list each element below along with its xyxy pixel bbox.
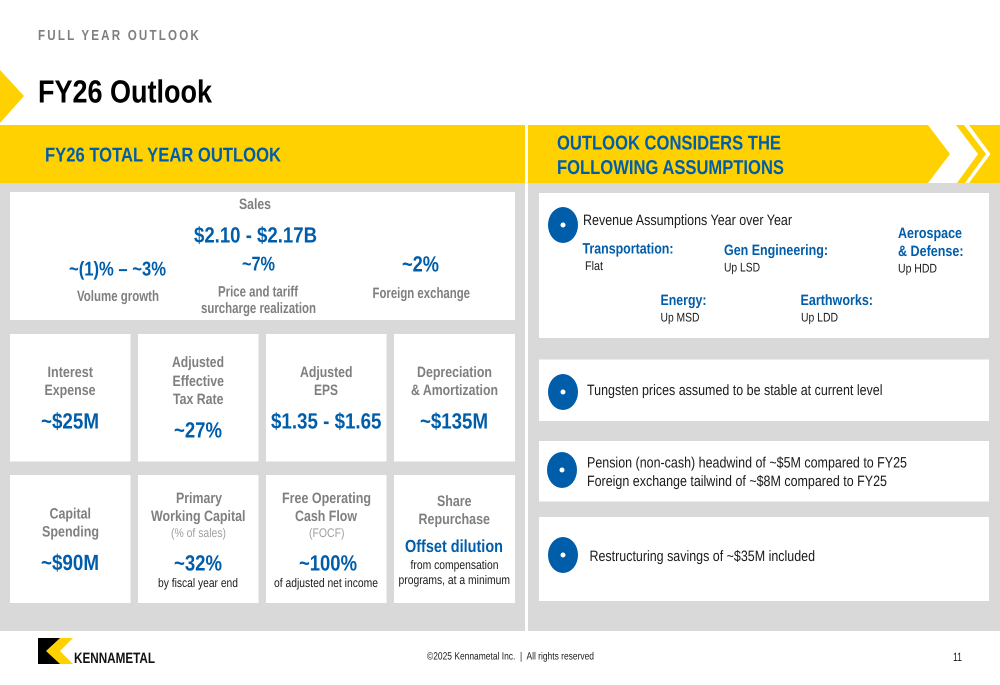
- panel: primary working capital: ~32%: [174, 550, 222, 576]
- aerospace and defense: Aerospace: [898, 225, 962, 242]
- wordmark: KENNAMETAL: [74, 650, 155, 667]
- aerospace and defense: [898, 225, 964, 276]
- panel: pension and foreign exchange: [539, 441, 989, 502]
- gen engineering: Gen Engineering:: [724, 242, 828, 259]
- panel: revenue assumptions: [539, 193, 989, 338]
- panel: share repurchase: from compensation: [410, 558, 499, 572]
- price label: Price and tariff: [218, 284, 299, 300]
- panel: interest expense: Interest: [48, 364, 93, 381]
- panel: depreciation and amortization: & Amortization: [411, 382, 498, 399]
- right header text: OUTLOOK CONSIDERS THE: [557, 132, 781, 154]
- left yellow header band: [0, 125, 525, 183]
- price value: ~7%: [242, 254, 275, 276]
- panel: tungsten: [539, 360, 989, 421]
- aerospace and defense: Up HDD: [898, 262, 937, 276]
- energy: [660, 292, 706, 324]
- icon: yellow title arrow: [0, 70, 24, 123]
- panel: depreciation and amortization: ~$135M: [420, 408, 488, 434]
- aerospace and defense: & Defense:: [898, 243, 964, 260]
- panel: share repurchase: [394, 475, 515, 603]
- price label: surcharge realization: [201, 300, 316, 317]
- sales heading: Sales: [239, 196, 271, 213]
- energy: Up MSD: [660, 310, 700, 324]
- panel: share repurchase: Offset dilution: [405, 536, 503, 556]
- panel: adjusted effective tax rate: Tax Rate: [173, 391, 224, 408]
- panel: primary working capital: [138, 475, 258, 603]
- panel: free operating cash flow: Cash Flow: [295, 508, 357, 525]
- icon: chevron one: [956, 125, 986, 183]
- icon: bullet: [547, 452, 577, 488]
- panel: free operating cash flow: Free Operating: [282, 490, 371, 507]
- price label: [201, 284, 316, 317]
- title: FY26 Outlook: [38, 74, 212, 110]
- transportation: Flat: [585, 259, 603, 273]
- panel: share repurchase: Share: [437, 493, 472, 510]
- panel: primary working capital: Working Capital: [151, 508, 246, 525]
- foreign exchange value: ~2%: [402, 252, 439, 276]
- panel: adjusted EPS: [266, 334, 386, 462]
- panel: free operating cash flow: ~100%: [299, 550, 357, 576]
- panel: depreciation and amortization: [394, 334, 515, 462]
- icon: bullet: [548, 374, 578, 410]
- earthworks: Up LDD: [801, 310, 838, 324]
- icon: bullet: [548, 207, 578, 243]
- panel: interest expense: ~$25M: [41, 408, 99, 434]
- panel: adjusted effective tax rate: ~27%: [174, 418, 222, 442]
- revenue heading: Revenue Assumptions Year over Year: [583, 212, 792, 229]
- right header text: FOLLOWING ASSUMPTIONS: [557, 157, 784, 179]
- right yellow header band with chevrons: [528, 125, 1000, 183]
- sales value: $2.10 - $2.17B: [194, 222, 317, 248]
- panel: free operating cash flow: of adjusted net income: [274, 576, 378, 590]
- gen engineering: [724, 242, 828, 274]
- volume growth value: ~(1)% – ~3%: [69, 258, 166, 280]
- panel: adjusted effective tax rate: Effective: [172, 373, 224, 390]
- panel: share repurchase: programs, at a minimum: [398, 573, 510, 587]
- foreign exchange label: Foreign exchange: [372, 285, 470, 302]
- panel: interest expense: Expense: [44, 382, 96, 399]
- tungsten text: Tungsten prices assumed to be stable at current level: [587, 382, 882, 399]
- icon: chevron two: [969, 125, 1000, 183]
- right header text: [557, 132, 784, 179]
- icon: K mark: [38, 638, 73, 664]
- panel: adjusted EPS: Adjusted: [300, 364, 352, 381]
- panel: primary working capital: (% of sales): [171, 526, 226, 540]
- transportation: [582, 240, 674, 273]
- pension text: [587, 454, 907, 490]
- volume growth label: Volume growth: [77, 288, 159, 305]
- eyebrow heading: FULL YEAR OUTLOOK: [38, 28, 199, 44]
- pension text: Foreign exchange tailwind of ~$8M compared to FY25: [587, 473, 887, 490]
- transportation: Transportation:: [582, 240, 674, 258]
- logo: Kennametal: [38, 638, 155, 667]
- panel: share repurchase: Repurchase: [418, 511, 490, 528]
- pension text: Pension (non-cash) headwind of ~$5M compared to FY25: [587, 454, 907, 472]
- panel: free operating cash flow: [266, 475, 386, 603]
- restructuring text: Restructuring savings of ~$35M included: [590, 548, 815, 565]
- panel: adjusted EPS: EPS: [314, 382, 338, 399]
- panel: sales: [10, 192, 515, 320]
- panel: primary working capital: Primary: [176, 490, 223, 507]
- panel: adjusted EPS: $1.35 - $1.65: [271, 408, 382, 434]
- panel: restructuring: [539, 517, 989, 601]
- panel: primary working capital: by fiscal year end: [158, 576, 238, 590]
- page number: 11: [953, 650, 962, 664]
- grey background panel: [0, 183, 1000, 631]
- earthworks: [800, 292, 873, 324]
- panel: free operating cash flow: (FOCF): [309, 526, 344, 540]
- panel divider: [525, 125, 528, 631]
- panel: adjusted effective tax rate: [138, 334, 258, 462]
- icon: bullet: [548, 537, 578, 573]
- panel: interest expense: [10, 334, 130, 462]
- panel: depreciation and amortization: Depreciation: [417, 364, 492, 381]
- panel: capital spending: Spending: [42, 524, 99, 540]
- panel: capital spending: Capital: [50, 506, 91, 522]
- energy: Energy:: [660, 292, 706, 309]
- panel: capital spending: [10, 475, 130, 603]
- panel: capital spending: ~$90M: [41, 550, 99, 575]
- earthworks: Earthworks:: [800, 292, 873, 309]
- panel: adjusted effective tax rate: Adjusted: [172, 354, 224, 371]
- copyright: ©2025 Kennametal Inc. | All rights reserved: [427, 650, 594, 662]
- left header text: FY26 TOTAL YEAR OUTLOOK: [45, 144, 281, 166]
- gen engineering: Up LSD: [724, 260, 760, 274]
